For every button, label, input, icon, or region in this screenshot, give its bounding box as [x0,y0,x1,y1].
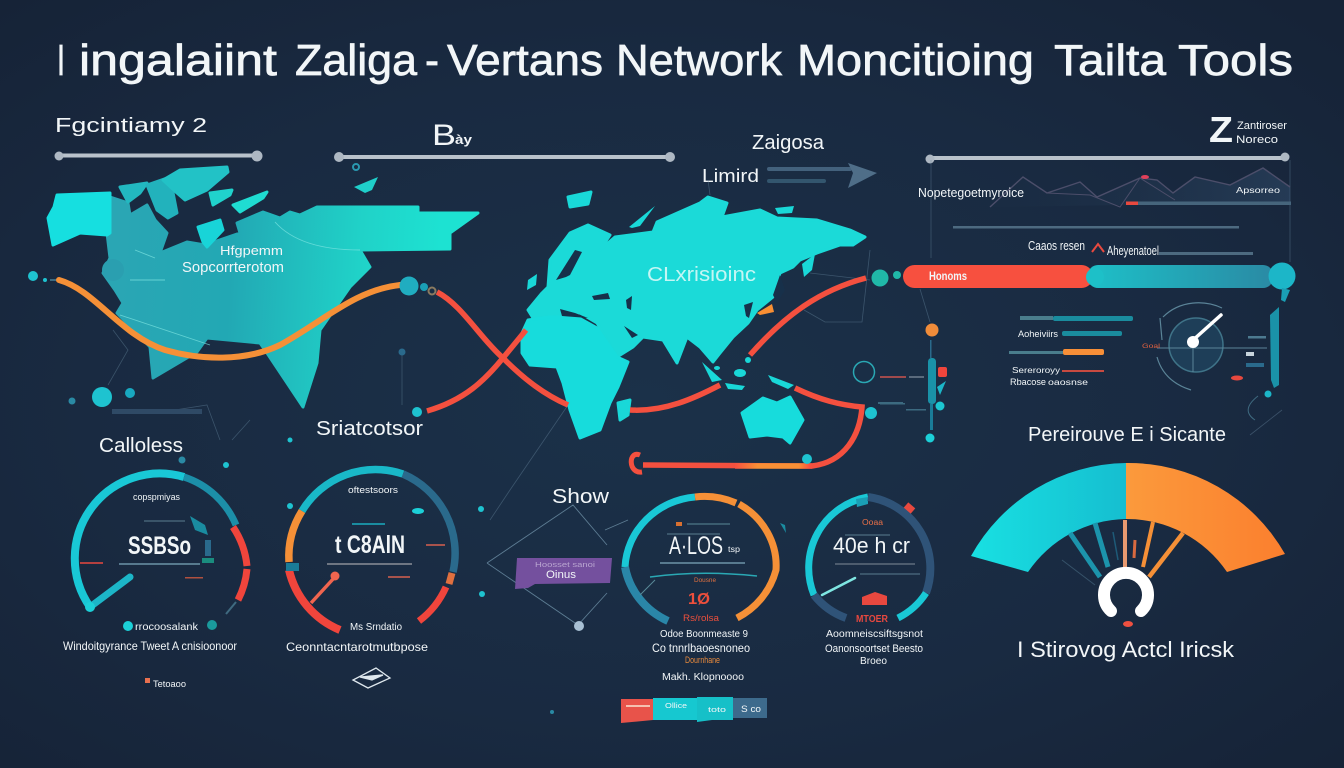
gauge 1 [75,473,247,633]
network route: orange [59,280,400,358]
line chart panel [918,168,1291,258]
callout: purple box with diamond lines: Hoosset sanoi [535,562,596,569]
gauge 3: A·LOS [669,532,723,560]
gauge 2: t C8AlN [335,531,405,559]
gauge 2 caption: Ceonntacntarotmutbpose [286,640,428,654]
map: left continent [48,167,478,407]
gauge 3: Dousne [694,578,717,584]
callout: purple box with diamond lines [487,505,628,631]
colored legend tiles: toto [708,707,726,714]
heading: Performance: Pereirouve E i Sicante [1028,424,1226,446]
gauge 1 caption: Windoitgyrance Tweet A cnisioonoor [63,639,237,653]
gauge 3 caption [652,629,750,683]
network nodes [28,164,903,714]
gauge 2 [286,470,455,633]
map label [182,243,284,276]
gauge 1: SSBSo [128,532,191,560]
dial icon: Goal [1142,344,1160,350]
status bar: red and teal: Honoms [929,269,967,283]
gauge 2: Ms Srndatio [350,622,402,633]
ring [1104,573,1148,611]
map label: Sopcorrterotom [182,259,284,276]
gauge 4: MTOER [856,614,889,625]
title: Tailta [1054,36,1167,85]
horizontal bar list: Sereroroyy [1012,365,1061,375]
section headings and rules: Limird [702,166,759,186]
line chart panel: Apsorreo [1236,186,1281,195]
section headings and rules: ày [455,132,473,147]
gauge 3: 1Ø [688,591,710,608]
ring node [854,362,902,382]
islands [702,357,794,390]
icon: plane tile [353,668,390,688]
status bar: red and teal [903,262,1296,302]
section headings and rules: Fgcintiamy 2 [55,115,207,137]
section headings and rules: Zantiroser [1237,120,1287,132]
gauge 4: 40e h cr [833,533,910,558]
dial icon [1142,303,1267,390]
map label: Hfgpemm [220,243,283,258]
right pipe [1248,307,1279,420]
left pipe with markers [880,324,947,442]
faint network lines [108,160,1290,520]
map: center world [522,192,865,443]
title: I [57,36,65,85]
gauge 4 caption: Broeo [860,656,887,667]
callout: purple box with diamond lines: Oinus [546,569,577,581]
gauge 4: Ooaa [862,518,884,527]
gauge 4 caption: Aoomneiscsiftsgsnot [826,629,923,640]
colored legend tiles: S co [741,704,761,714]
performance fan gauge [971,463,1285,627]
arrow: Limird pointer [767,163,877,188]
line chart panel: Aheyenatoel [1107,243,1159,258]
gauge 3 caption: Co tnnrlbaoesnoneo [652,641,750,655]
gauge 2: oftestsoors [348,485,399,495]
section headings and rules: Zaigosa [752,132,825,154]
colored legend tiles: Ollice [665,703,687,710]
caption: Performance gauge: I Stirovog Actcl Iricsk [1017,637,1235,662]
gauge 3 caption: Odoe Boonmeaste 9 [660,629,748,640]
title: ingalaiint [79,36,277,85]
title [57,36,1293,85]
section headings and rules: Z [1209,109,1233,150]
horizontal bar list [1009,316,1133,387]
title: Tools [1178,36,1293,85]
title: Network [616,36,783,85]
title: Moncitioing [797,36,1034,85]
gauge 4 caption [825,629,923,667]
gauge 4 caption: Oanonsoortset Beesto [825,643,923,655]
colored legend tiles [621,697,767,723]
section headings and rules: Noreco [1236,134,1278,146]
map label: CLxrisioinc [647,264,756,286]
horizontal bar list: Aoheiviirs [1018,329,1059,339]
section headings and rules [54,109,1290,186]
gauge 3: tsp [728,545,741,554]
gauge 3 caption: Makh. Klopnoooo [662,672,744,683]
section headings and rules: B [432,119,456,152]
gauge 3 caption: Dournhane [685,655,720,665]
line chart panel: Caaos resen [1028,238,1085,253]
seas [556,250,785,338]
heading: Sriatcotsor: Sriatcotsor [316,418,423,440]
title: Vertans [447,36,603,85]
gauge 1: rrocoosalank [135,622,199,633]
gauge 3 [625,496,786,623]
gauge 4 [809,497,930,625]
gauge 3: Rs/rolsa [683,613,719,623]
horizontal bar list: Rbacose [1010,377,1046,387]
title: - [425,36,439,85]
heading: Show: Show [552,486,610,508]
legend chip: Tetoaoo [153,679,186,689]
title: Zaliga [295,36,418,85]
network route: red [427,278,866,472]
heading: Calloless: Calloless [99,435,183,457]
line chart panel: Nopetegoetmyroice [918,185,1024,200]
gauge 1: copspmiyas [133,492,180,502]
horizontal bar list: oaosnse [1048,378,1089,387]
